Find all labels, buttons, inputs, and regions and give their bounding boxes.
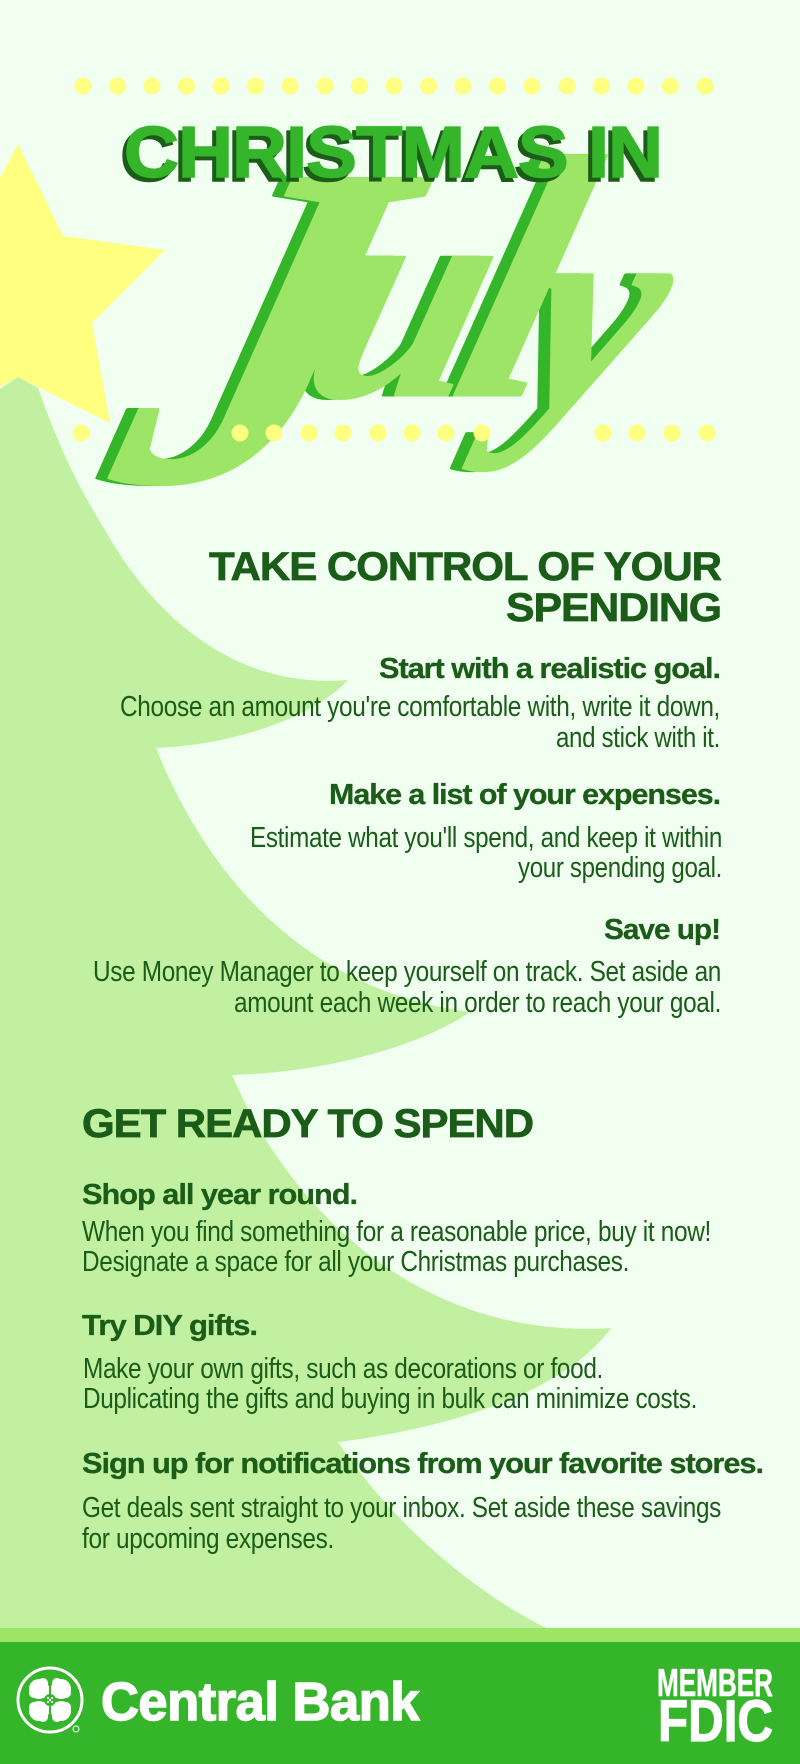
text block: save (93, 956, 721, 1019)
dotted line: top (74, 78, 714, 94)
title script word: shadow: y (448, 150, 697, 471)
text block: expenses (250, 822, 722, 884)
subheading: goal: Start with a realistic goal. (379, 653, 720, 685)
title script word: shadow: u (268, 129, 524, 461)
subheading: expenses: Make a list of your expenses. (329, 779, 720, 811)
icon: Central Bank dogwood logo (18, 1668, 82, 1732)
subheading: save: Save up! (604, 914, 720, 946)
icon: star on the tree (0, 144, 165, 423)
tree silhouette (0, 377, 611, 1628)
text block: shop: Designate a space for all your Christmas purchases. (82, 1246, 629, 1278)
text block: DIY: Duplicating the gifts and buying in bulk can minimize costs. (83, 1383, 697, 1415)
text block: goal: and stick with it. (556, 722, 720, 754)
FDIC member mark: FDIC (658, 1689, 773, 1754)
heading: GET READY TO SPEND (82, 1102, 533, 1146)
text block: goal (120, 691, 720, 754)
title script word: u (280, 129, 536, 461)
text block: DIY: Make your own gifts, such as decorations or food. (83, 1353, 603, 1385)
subheading: shop: Shop all year round. (82, 1179, 357, 1211)
title script word: y (460, 150, 709, 471)
title line: CHRISTMAS IN (124, 113, 662, 193)
subheading: DIY: Try DIY gifts. (82, 1310, 257, 1342)
title script word: J (75, 71, 463, 580)
panel: get ready to spend (82, 1102, 763, 1555)
FDIC member mark (657, 1662, 773, 1754)
bank name: Central Bank (101, 1672, 420, 1732)
subheading: notifications: Sign up for notifications from your favorite stores. (82, 1448, 763, 1480)
footer band (0, 1642, 800, 1764)
text block: shop (82, 1216, 711, 1278)
heading (209, 545, 722, 630)
title script word: shadow: l (415, 87, 614, 470)
heading: SPENDING (506, 586, 721, 630)
text block: save: amount each week in order to reach your goal. (234, 987, 721, 1019)
title script word: shadow: J (63, 71, 451, 580)
heading: TAKE CONTROL OF YOUR (209, 545, 722, 589)
text block: expenses: Estimate what you'll spend, and keep it within (250, 822, 722, 854)
text block: notifications (82, 1492, 721, 1555)
title line: shadow: CHRISTMAS IN (120, 117, 658, 197)
panel: take control of your spending (93, 545, 722, 1019)
title script word: l (427, 87, 626, 470)
footer accent strip (0, 1628, 800, 1642)
dotted line: bottom (72, 424, 716, 442)
text block: DIY (83, 1353, 697, 1415)
text block: notifications: for upcoming expenses. (82, 1523, 334, 1555)
text block: expenses: your spending goal. (518, 852, 722, 884)
